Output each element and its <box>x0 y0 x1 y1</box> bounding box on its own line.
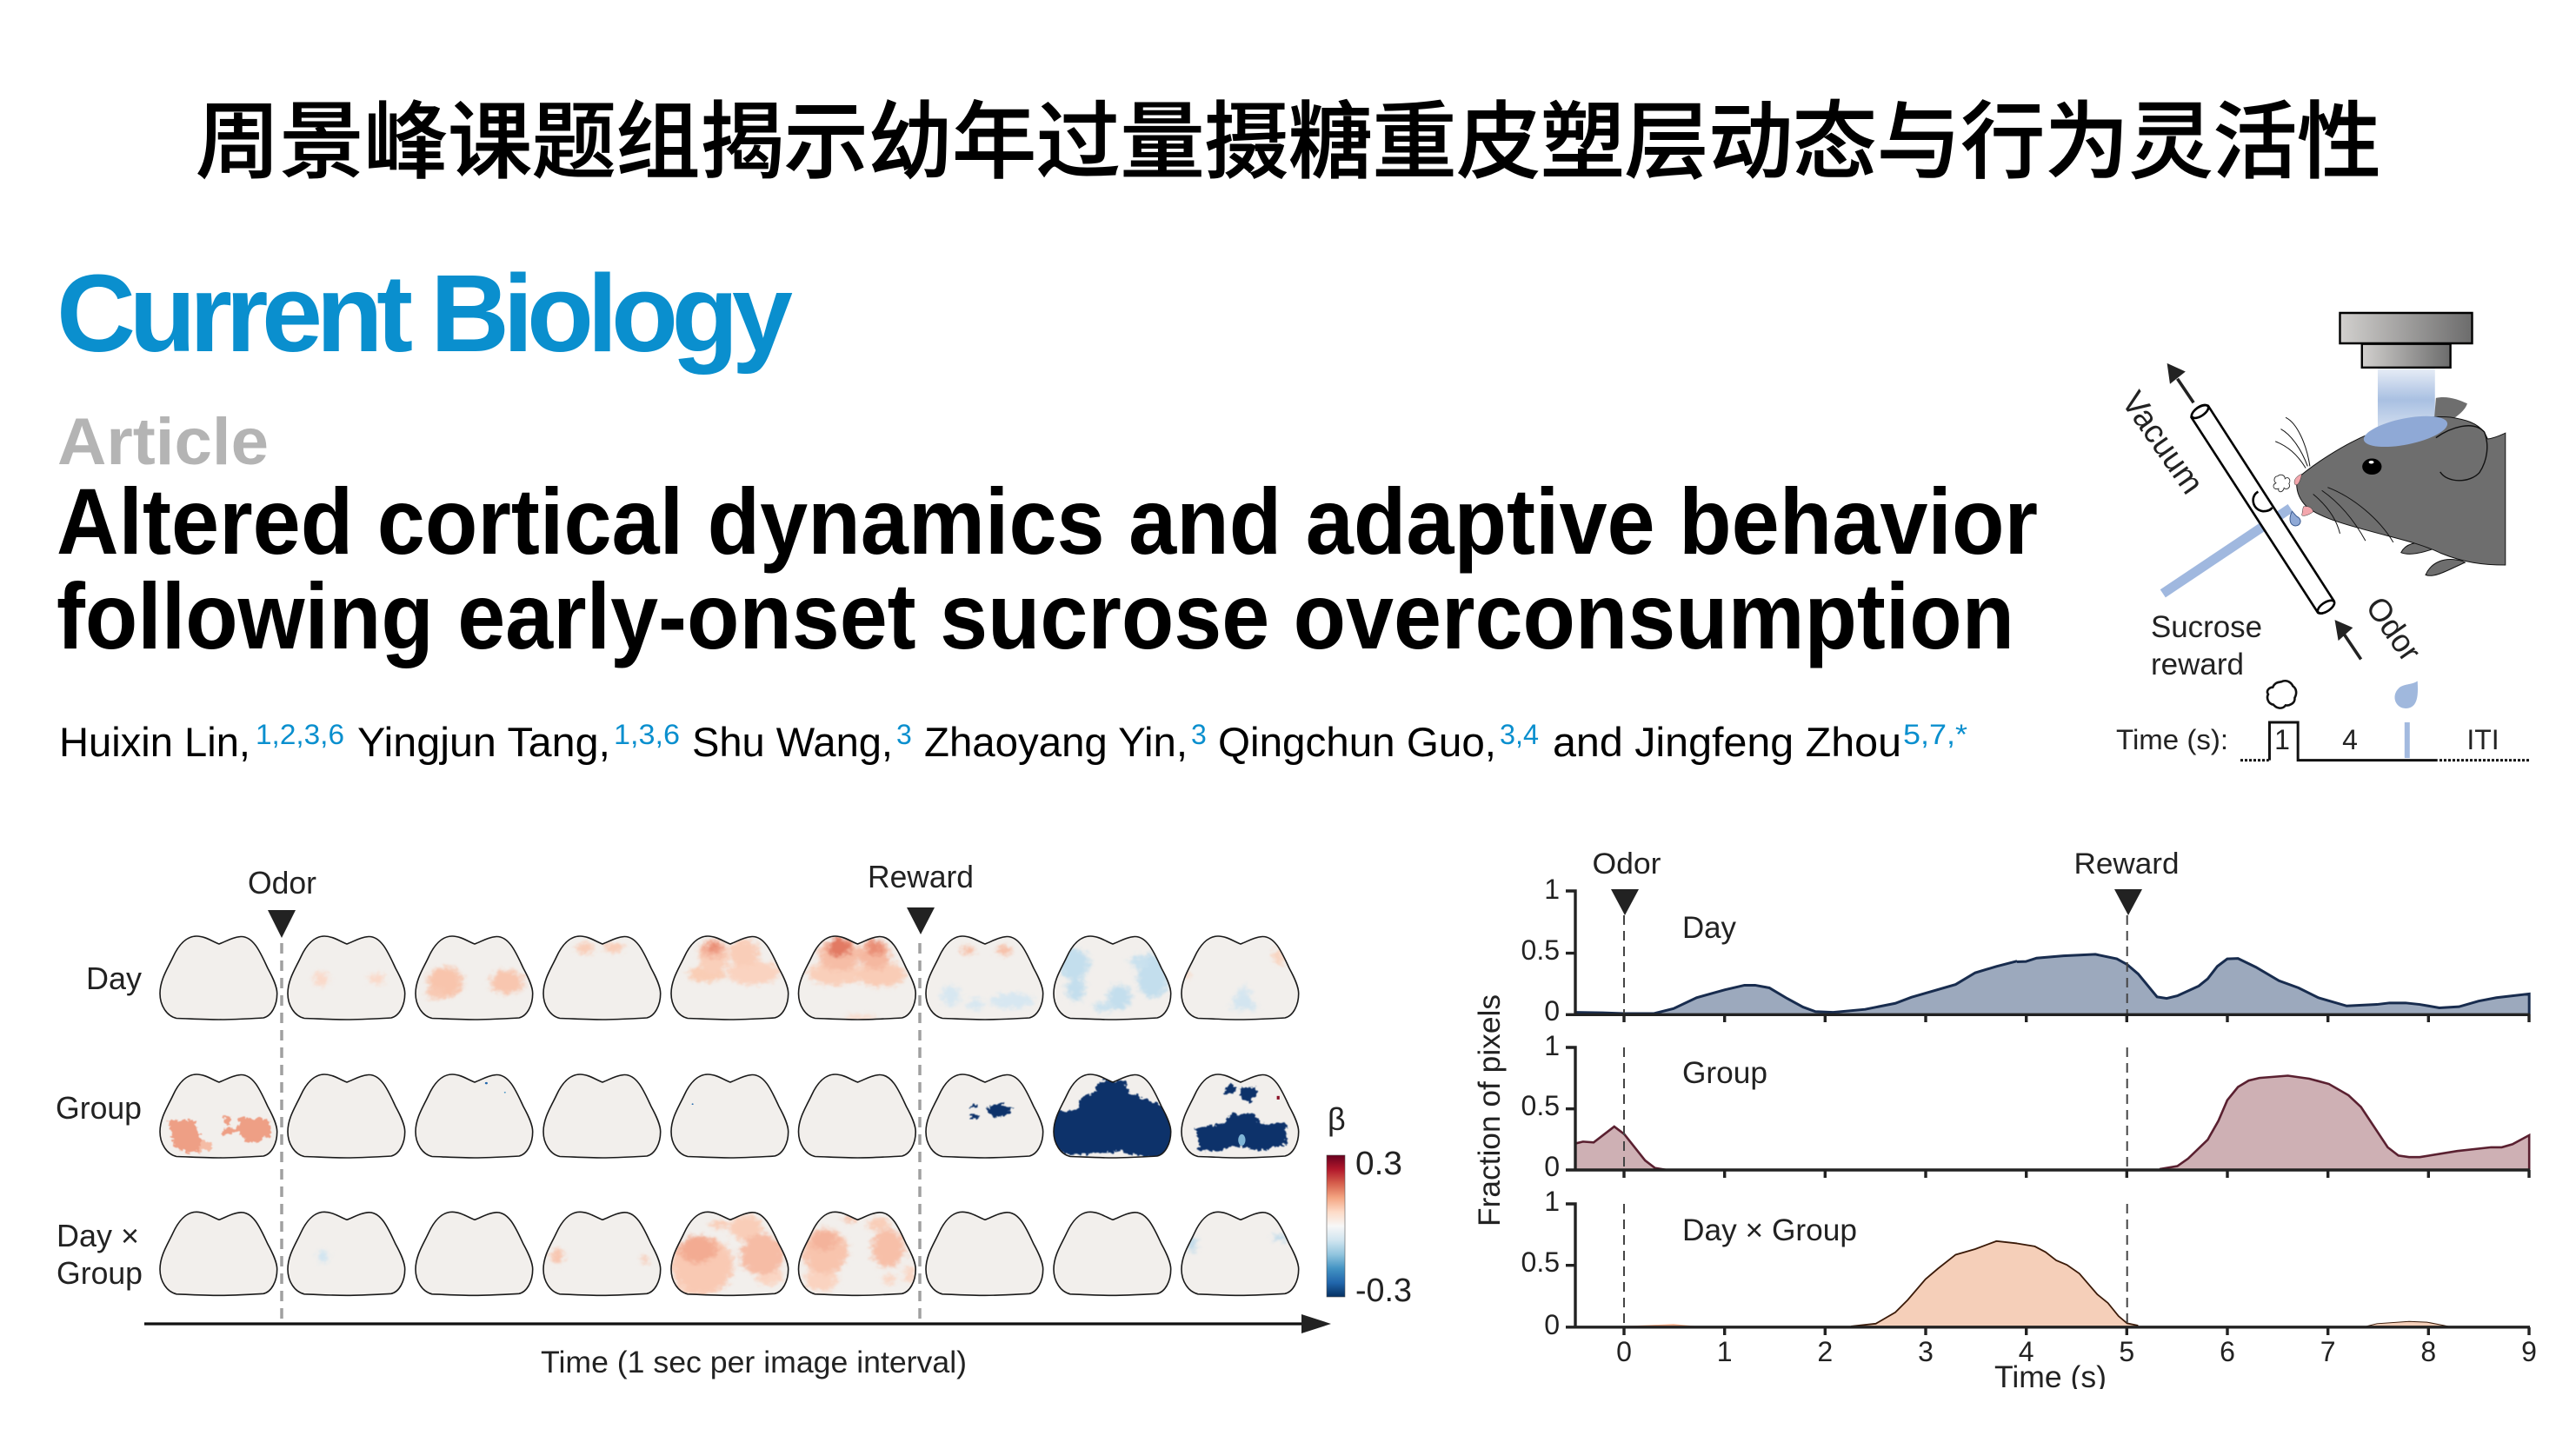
y tick labels: 1 <box>1544 1030 1560 1061</box>
odor marker: left panel: Odor <box>248 865 316 901</box>
paper title <box>57 469 2038 668</box>
chart: Day x Group: Day × Group <box>1682 1213 1857 1247</box>
authors: Shu Wang, <box>692 719 893 765</box>
x tick labels: 4 <box>2019 1336 2034 1367</box>
authors: Huixin Lin, <box>59 719 250 765</box>
paper title: following early-onset sucrose overconsumption <box>57 563 2014 668</box>
y tick labels <box>1521 874 1560 1340</box>
experimental setup illustration <box>2114 313 2530 761</box>
chart: Group <box>1575 1056 2529 1170</box>
y tick labels: 0.5 <box>1521 1246 1560 1278</box>
label: vacuum: Vacuum <box>2114 385 2210 501</box>
timeline labels <box>2116 724 2499 755</box>
x tick labels: 2 <box>1817 1336 1833 1367</box>
y tick labels: 1 <box>1544 1186 1560 1217</box>
row labels: Group <box>57 1255 143 1291</box>
journal name: Current Biology <box>57 252 793 375</box>
icon: odor puff <box>2273 475 2290 492</box>
authors: 1,3,6 <box>614 719 680 750</box>
y tick labels: 0 <box>1544 1151 1560 1182</box>
authors: 1,2,3,6 <box>256 719 344 750</box>
axes <box>1566 891 2530 1335</box>
authors <box>59 719 1967 765</box>
row labels: Day × <box>57 1218 139 1253</box>
tube <box>2189 402 2337 615</box>
arrow: vacuum <box>2178 379 2193 402</box>
article label: Article <box>57 405 269 479</box>
icon: droplet <box>2290 511 2300 526</box>
x tick labels: 0 <box>1616 1336 1632 1367</box>
chart: Day: Day <box>1682 911 1736 945</box>
timeline labels: ITI <box>2466 724 2499 755</box>
x tick labels: 3 <box>1918 1336 1934 1367</box>
y tick labels: 0.5 <box>1521 1090 1560 1121</box>
line charts: fraction of pixels <box>1473 847 2537 1394</box>
colorbar <box>1327 1101 1412 1309</box>
markers: Reward <box>2074 847 2179 881</box>
paper title: Altered cortical dynamics and adaptive behavior <box>57 469 2038 574</box>
authors: 3 <box>1191 719 1207 750</box>
authors: Qingchun Guo, <box>1218 719 1496 765</box>
authors: 5,7,* <box>1903 719 1967 750</box>
chart: Day <box>1575 911 2529 1014</box>
icon: odor cloud <box>2267 681 2296 708</box>
arrow: odor <box>2344 634 2361 660</box>
label: sucrose reward <box>2151 610 2262 681</box>
reference lines <box>1624 915 2127 1327</box>
x axis title: Time (s) <box>1994 1360 2107 1394</box>
x tick labels: 8 <box>2420 1336 2436 1367</box>
y tick labels: 0 <box>1544 1309 1560 1340</box>
icon: microscope objective <box>2340 313 2473 368</box>
row labels: Day <box>86 960 142 996</box>
time axis label: Time (1 sec per image interval) <box>541 1346 967 1379</box>
y axis title: Fraction of pixels <box>1473 994 1507 1226</box>
reward marker: left panel <box>868 859 974 1324</box>
authors: Zhaoyang Yin, <box>924 719 1188 765</box>
x tick labels: 7 <box>2320 1336 2336 1367</box>
light beam <box>2378 369 2435 431</box>
authors: and Jingfeng Zhou <box>1553 719 1901 765</box>
odor marker: left panel <box>248 865 316 1324</box>
authors: Yingjun Tang, <box>357 719 610 765</box>
colorbar: -0.3 <box>1355 1273 1412 1309</box>
x tick labels: 6 <box>2220 1336 2235 1367</box>
timeline labels: 1 <box>2274 724 2290 755</box>
title: 周景峰课题组揭示幼年过量摄糖重皮塑层动态与行为灵活性 <box>196 73 2381 196</box>
chart: Group: Group <box>1682 1056 1767 1090</box>
timeline labels: Time (s): <box>2116 724 2228 755</box>
icon: mouse <box>2275 397 2506 575</box>
y tick labels: 0 <box>1544 995 1560 1027</box>
time axis arrow <box>144 1314 1331 1333</box>
x tick labels: 1 <box>1717 1336 1733 1367</box>
label: odor: Odor <box>2359 590 2428 668</box>
authors: 3,4 <box>1500 719 1539 750</box>
x tick labels <box>1616 1336 2537 1367</box>
y tick labels: 0.5 <box>1521 934 1560 966</box>
label: sucrose reward: reward <box>2151 648 2244 681</box>
colorbar: 0.3 <box>1355 1146 1402 1182</box>
row labels <box>56 960 143 1291</box>
brain map row: Group <box>160 1074 1299 1164</box>
row labels: Group <box>56 1090 142 1126</box>
reward marker: left panel: Reward <box>868 859 974 894</box>
y tick labels: 1 <box>1544 874 1560 905</box>
label: sucrose reward: Sucrose <box>2151 610 2262 644</box>
icon: reward droplet <box>2394 681 2418 708</box>
trial timeline trace <box>2240 722 2530 761</box>
timeline labels: 4 <box>2342 724 2358 755</box>
colorbar: β <box>1328 1101 1346 1137</box>
markers: Odor <box>1593 847 1661 881</box>
authors: 3 <box>896 719 912 750</box>
brain map row: Day <box>160 936 1299 1020</box>
x tick labels: 5 <box>2119 1336 2134 1367</box>
x tick labels: 9 <box>2521 1336 2537 1367</box>
brain map row: Day x Group <box>160 1212 1299 1296</box>
markers <box>1593 847 2179 915</box>
sucrose delivery bar <box>2163 508 2291 594</box>
chart: Day x Group <box>1602 1213 2448 1327</box>
